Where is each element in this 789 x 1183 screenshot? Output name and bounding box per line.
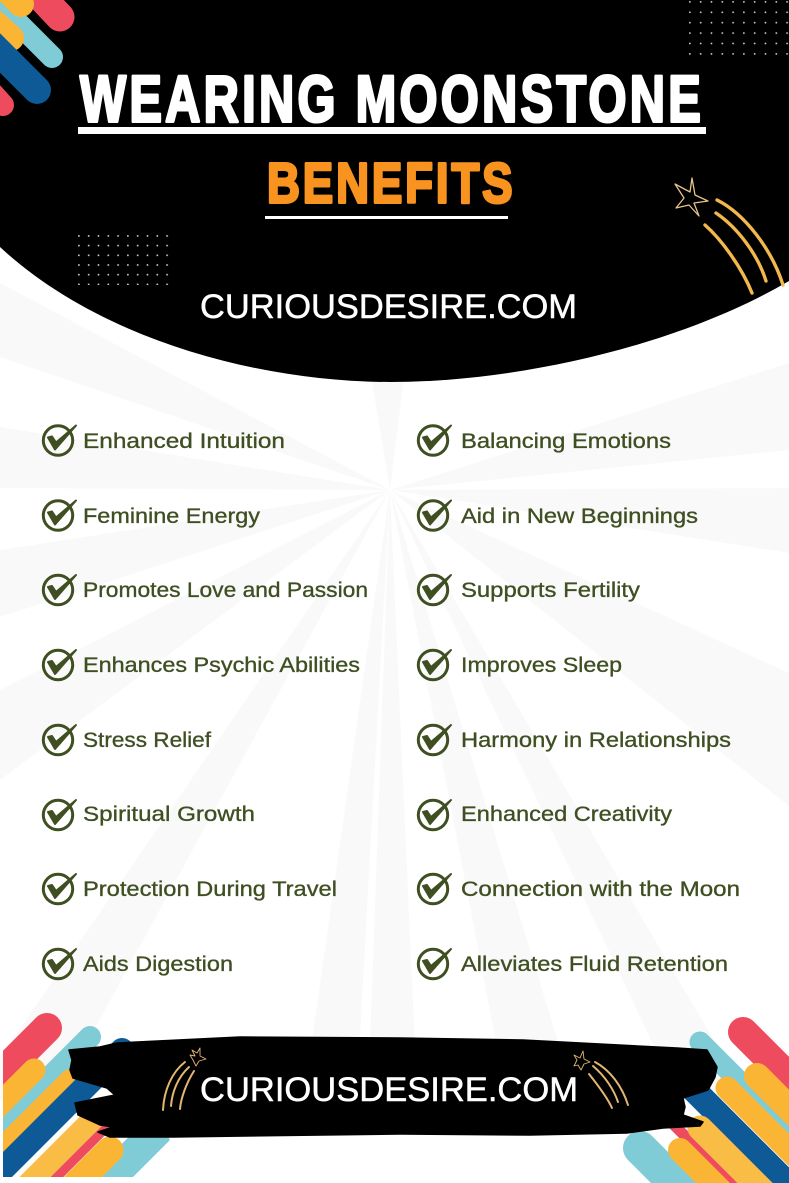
benefits list: right column: Improves Sleep — [461, 653, 622, 677]
benefits list: left column: Enhances Psychic Abilities — [83, 653, 360, 677]
subtitle underline — [265, 216, 508, 219]
benefits list: right column: Aid in New Beginnings — [461, 504, 698, 528]
benefits list: left column: Spiritual Growth — [83, 802, 255, 826]
dot grid: top right — [689, 1, 789, 56]
benefits list: right column: Connection with the Moon — [461, 877, 740, 901]
benefits list: right column: Supports Fertility — [461, 578, 640, 602]
benefits list: right column: Enhanced Creativity — [461, 802, 672, 826]
top-left colour stripes — [0, 0, 60, 105]
icon: shooting star banner left — [163, 1048, 206, 1110]
benefits list: left column: Enhanced Intuition — [83, 429, 285, 453]
subtitle: BENEFITS — [267, 151, 513, 215]
dot grid: left — [77, 234, 169, 285]
icon: shooting star banner right — [574, 1051, 628, 1108]
website url header: CURIOUSDESIRE.COM — [200, 288, 577, 326]
benefits list: right column: Alleviates Fluid Retention — [461, 952, 728, 976]
icon: shooting star top — [675, 178, 783, 293]
benefits list: left column: Stress Relief — [83, 728, 211, 752]
title underline — [78, 127, 706, 134]
black header shape — [0, 0, 789, 382]
benefits list: left column — [43, 426, 368, 979]
benefits list: right column: Balancing Emotions — [461, 429, 671, 453]
bottom-right colour stripes — [640, 1032, 789, 1183]
benefits list: left column: Promotes Love and Passion — [83, 578, 368, 602]
benefits list: left column: Aids Digestion — [83, 952, 233, 976]
benefits list: right column: Harmony in Relationships — [461, 728, 731, 752]
benefits list: right column — [418, 426, 740, 979]
website url banner: CURIOUSDESIRE.COM — [200, 1071, 578, 1109]
background sunburst rays — [0, 283, 789, 1183]
benefits list: left column: Feminine Energy — [83, 504, 260, 528]
black brush banner — [69, 1037, 717, 1137]
bottom-left colour stripes — [0, 1028, 150, 1183]
title: WEARING MOONSTONE — [80, 62, 701, 136]
benefits list: left column: Protection During Travel — [83, 877, 337, 901]
